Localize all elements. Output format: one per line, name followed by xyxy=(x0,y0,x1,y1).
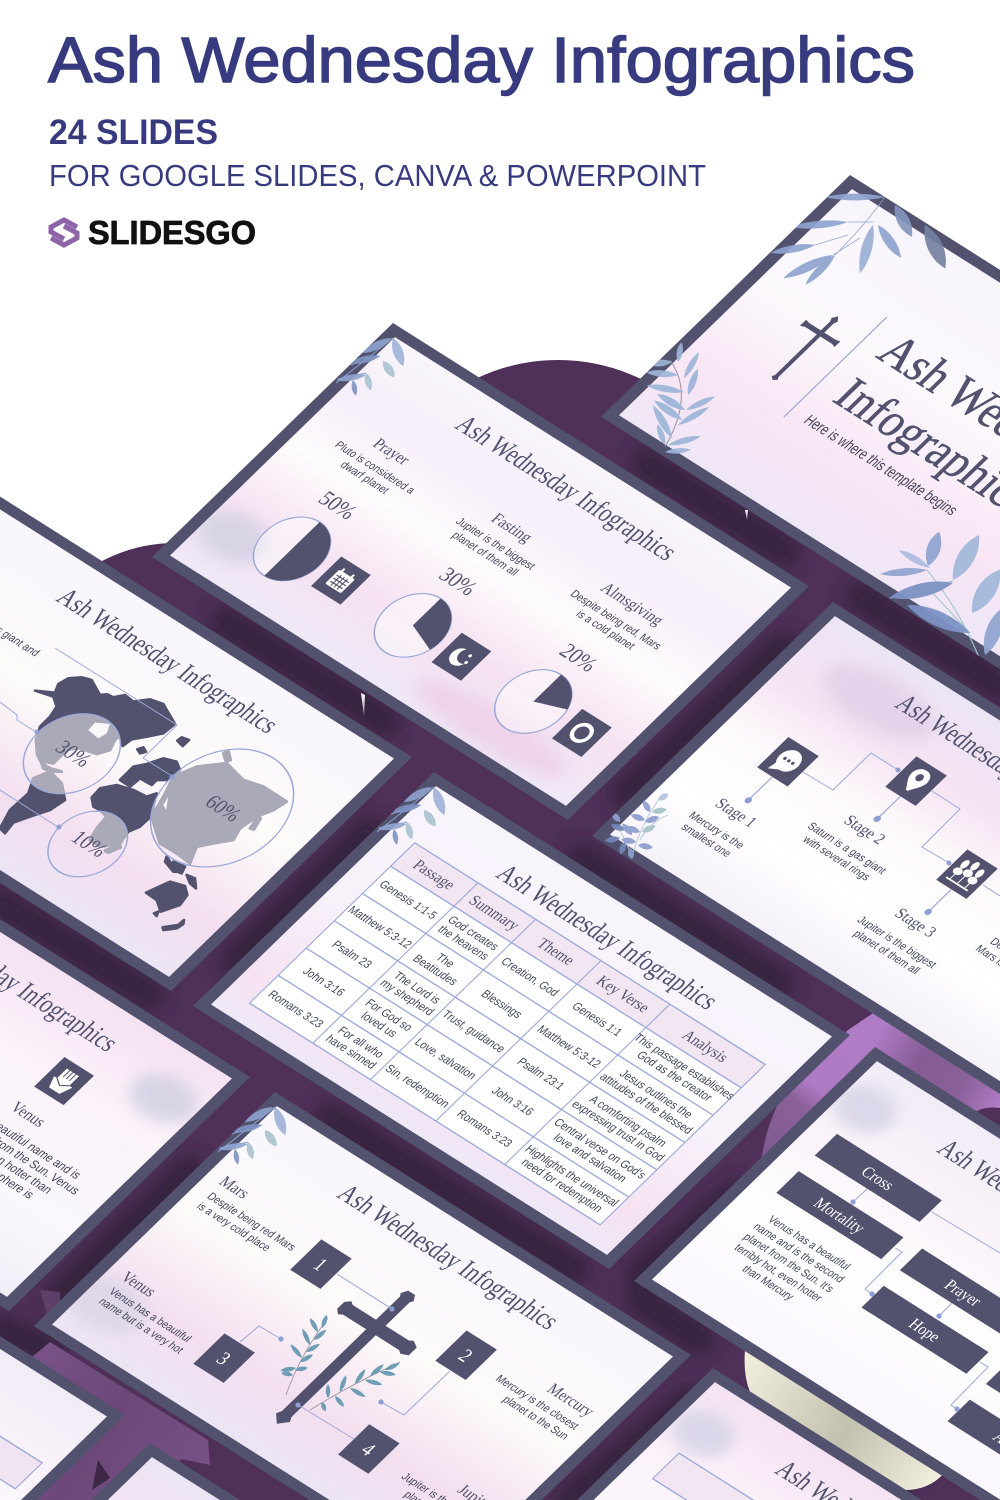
stage 2: with several rings xyxy=(799,833,873,884)
table header: Theme xyxy=(533,935,579,969)
mercury: Mercury xyxy=(543,1381,598,1420)
table body: need for redemption xyxy=(518,1157,605,1215)
background: bright purple band xyxy=(760,1012,1000,1170)
table body: A comforting psalm xyxy=(586,1094,669,1150)
table header: Passage xyxy=(409,857,459,893)
table body: Genesis 1:1 xyxy=(569,1001,624,1039)
leaves: title slide bottom right xyxy=(880,530,1000,660)
stage 3 xyxy=(844,835,1000,981)
description: Venus has a beautiful xyxy=(765,1214,853,1273)
table body: Matthew 5:3-12 xyxy=(534,1024,603,1071)
map: bubbles and labels: 10% xyxy=(66,827,112,862)
table body: Highlights the universal xyxy=(522,1144,621,1209)
table body: God as the creator xyxy=(633,1049,715,1104)
table body: loved us xyxy=(358,1010,400,1040)
watercolor blob xyxy=(830,1082,900,1136)
mercury: planet to the Sun xyxy=(500,1394,571,1442)
title: Ash Wednesday Infographics xyxy=(48,24,915,96)
number 2 xyxy=(435,1330,497,1380)
column: almsgiving: 20% xyxy=(554,639,603,676)
background: lighter purple and cream accents xyxy=(0,1290,945,1500)
table body: Jesus outlines the xyxy=(616,1068,695,1121)
leaves: table slide corner xyxy=(377,784,449,845)
number 2: 2 xyxy=(453,1346,477,1367)
stage connectors xyxy=(803,753,1000,896)
description: than Mercury xyxy=(739,1263,797,1303)
stage 3: Jupiter is the biggest xyxy=(854,914,939,971)
column: almsgiving: is a cold planet xyxy=(573,608,637,652)
description: planet from the Sun. It's xyxy=(740,1231,837,1295)
background: dark purple shape xyxy=(0,360,1000,1500)
mars: Despite being red Mars xyxy=(204,1191,299,1254)
leaves: cross slide corner xyxy=(218,1104,290,1165)
map: bubbles and labels xyxy=(0,658,323,940)
map: bubbles and labels: 30% xyxy=(50,737,96,771)
table body: For God so xyxy=(362,997,415,1034)
watercolor blob xyxy=(824,664,935,742)
table body: God creates xyxy=(445,914,501,953)
column: prayer: dwarf planet xyxy=(337,459,391,497)
mercury: Mercury is the closest xyxy=(492,1373,581,1432)
number 4: 4 xyxy=(356,1440,380,1460)
venus xyxy=(94,1269,213,1356)
column: almsgiving xyxy=(461,570,703,769)
logo: slidesgo: SLIDESGO xyxy=(88,214,256,251)
box: prayer xyxy=(900,1249,1000,1337)
table header xyxy=(0,1233,42,1489)
slide: bottom center xyxy=(0,1443,566,1500)
slide: pie charts xyxy=(152,323,809,820)
cross xyxy=(242,1271,449,1447)
table body: Genesis 1:1-5 xyxy=(376,879,439,922)
table body: The xyxy=(433,952,457,970)
leaves: title slide top branch xyxy=(770,194,952,287)
table header: Summary xyxy=(465,892,524,934)
mercury xyxy=(482,1357,598,1442)
map: continents xyxy=(0,677,287,930)
subtitle: Here is where this template begins xyxy=(800,412,961,519)
icon: hands xyxy=(34,1057,94,1105)
column: fasting xyxy=(347,498,583,692)
stage 2 xyxy=(794,742,969,887)
box: third column upper xyxy=(986,1362,1000,1450)
table body: Romans 3:23 xyxy=(454,1108,515,1150)
number 3 xyxy=(193,1333,255,1383)
table body: The Lord is xyxy=(390,970,443,1007)
mars xyxy=(192,1173,315,1264)
table body: For all who xyxy=(334,1025,386,1061)
number 4 xyxy=(338,1424,400,1474)
box: ashes xyxy=(947,1400,1000,1488)
table body: Blessings xyxy=(478,988,525,1021)
table body: Central verse on God's xyxy=(551,1117,648,1182)
box: hope: Hope xyxy=(904,1316,944,1345)
table body: the heavens xyxy=(435,924,491,963)
leaves: stages slide corner xyxy=(605,791,670,859)
box: prayer: Prayer xyxy=(940,1277,985,1310)
description: name and is the second xyxy=(750,1221,847,1285)
leaves: pie slide corner xyxy=(336,335,408,396)
slide: table xyxy=(193,772,850,1269)
column: almsgiving: Almsgiving xyxy=(597,580,667,629)
venus: Venus has a beautiful xyxy=(106,1286,194,1345)
table body xyxy=(250,843,766,1226)
background: blurred slide shadows xyxy=(0,463,1000,1500)
map: connector lines xyxy=(0,648,177,830)
box: cross xyxy=(815,1134,942,1222)
table body: attitudes of the blessed xyxy=(597,1071,695,1137)
column: prayer xyxy=(226,421,462,616)
table body: Trust, guidance xyxy=(439,1009,508,1055)
table body: John 3:16 xyxy=(300,966,347,999)
table body: love and salvation xyxy=(550,1132,629,1185)
small paper spikes xyxy=(361,510,748,716)
description: terribly hot, even hotter xyxy=(731,1242,825,1304)
table body: Matthew 5:3-12 xyxy=(345,904,414,951)
cross icon xyxy=(755,305,855,391)
table body: Romans 3:23 xyxy=(265,989,326,1030)
cross connectors xyxy=(240,1274,450,1439)
icon: right olive branch xyxy=(310,1361,400,1412)
subtitle: slide count: 24 SLIDES xyxy=(49,113,218,152)
watercolor blob xyxy=(70,1274,148,1334)
subtitle: platforms: FOR GOOGLE SLIDES, CANVA & POWERPOINT xyxy=(49,158,706,193)
map: highlighted regions xyxy=(31,714,288,864)
column: fasting: 30% xyxy=(434,563,483,600)
slide heading: Ash Wednesday Infographics xyxy=(449,410,684,566)
slide: bottom left table xyxy=(0,1152,125,1500)
box: hope xyxy=(861,1286,989,1374)
slide: venus icon xyxy=(0,919,250,1311)
icon: left olive branch xyxy=(280,1314,329,1395)
column: fasting: planet of them all xyxy=(449,530,521,578)
mars: Mars xyxy=(215,1173,253,1202)
slide: world map xyxy=(0,494,412,991)
slide: cross diagram xyxy=(30,1089,691,1500)
stage 1 xyxy=(675,730,829,862)
venus: Venus xyxy=(117,1269,160,1300)
slide: bottom table xyxy=(577,1368,922,1500)
jupiter xyxy=(388,1455,500,1500)
column: prayer: 50% xyxy=(313,487,362,524)
box: cross: Cross xyxy=(857,1164,898,1194)
leaves: title slide left branch xyxy=(646,342,716,455)
column: fasting: Jupiter is the biggest xyxy=(453,516,538,572)
number 1 xyxy=(290,1239,352,1289)
stage 1: Mercury is the xyxy=(686,810,747,852)
table body: expressing trust in God xyxy=(569,1099,667,1164)
stage 2: Saturn is a gas giant xyxy=(804,820,889,877)
flow connectors xyxy=(850,1189,1000,1412)
table header: Analysis xyxy=(678,1027,732,1066)
slide: title xyxy=(601,175,1000,680)
column: prayer: Prayer xyxy=(369,436,414,469)
column: almsgiving: Despite being red, Mars xyxy=(567,588,664,653)
slide heading: Ash Wednesday Infographics xyxy=(50,583,285,739)
mars: is a very cold place xyxy=(194,1201,273,1254)
box: mortality: Mortality xyxy=(809,1195,869,1237)
venus label: Venus xyxy=(6,1099,49,1131)
watercolor blob xyxy=(668,1406,738,1460)
table body: Psalm 23 xyxy=(329,939,374,971)
table body: Sin, redemption xyxy=(382,1063,452,1110)
venus: name but is a very hot xyxy=(96,1296,186,1356)
slide: stages xyxy=(592,602,1000,1099)
stage 3: planet of them all xyxy=(850,928,922,977)
table body: Creation, God xyxy=(498,956,561,999)
divider line xyxy=(784,317,887,417)
table body: Love, salvation xyxy=(412,1036,479,1082)
table header xyxy=(653,1453,1000,1500)
stage 3: Stage 3 xyxy=(890,905,940,941)
table body: This passage establishes xyxy=(631,1032,737,1103)
slide heading: Ash Wednesday Infographics xyxy=(331,1179,566,1335)
column: fasting: Fasting xyxy=(487,510,536,546)
number 1: 1 xyxy=(308,1255,332,1275)
table body: my shepherd xyxy=(377,977,436,1018)
stage 1: Stage 1 xyxy=(711,795,760,831)
slide heading: Ash Wednesday Infographics xyxy=(490,859,725,1015)
number 3: 3 xyxy=(211,1349,235,1370)
table header xyxy=(391,843,765,1088)
watercolor blob xyxy=(126,1070,201,1126)
watercolor blobs xyxy=(170,500,601,790)
table body: have sinned xyxy=(322,1033,379,1072)
slide: flow chart xyxy=(634,1047,1000,1500)
map: bubbles and labels: 60% xyxy=(200,791,246,826)
table body: John 3:16 xyxy=(489,1085,536,1118)
table body: Beatitudes xyxy=(410,953,460,988)
box: mortality xyxy=(776,1171,903,1259)
table header: Key Verse xyxy=(592,973,654,1016)
table body: Psalm 23:1 xyxy=(514,1056,567,1093)
stage 2: Stage 2 xyxy=(840,812,889,848)
stage 1: smallest one xyxy=(678,821,734,860)
column: prayer: Pluto is considered a xyxy=(332,439,418,497)
